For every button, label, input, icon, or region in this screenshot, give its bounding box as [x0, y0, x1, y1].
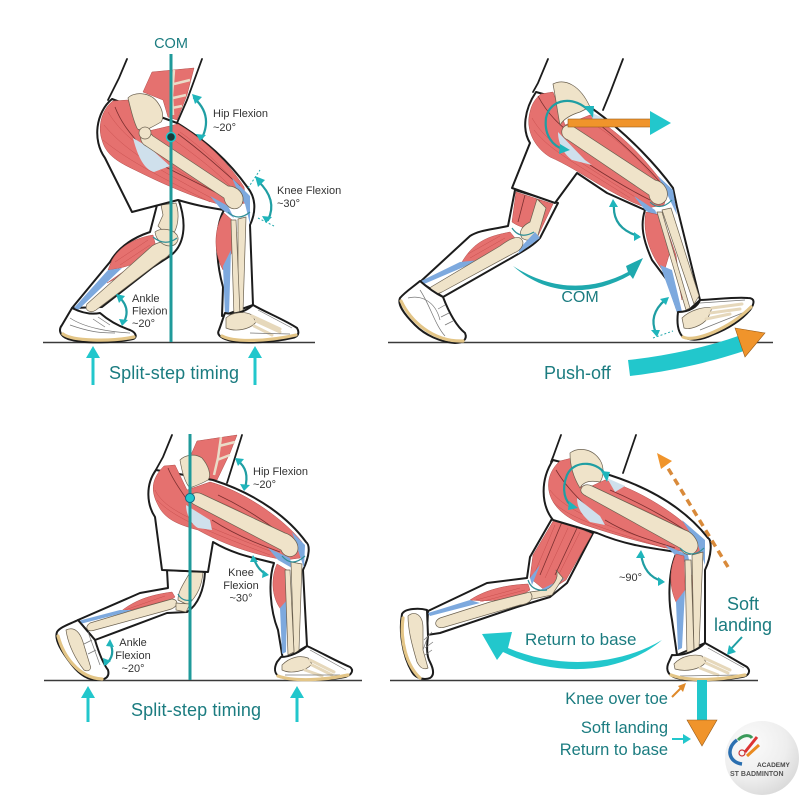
- small pointer arrow: [672, 734, 691, 744]
- centre of mass marker: [166, 132, 176, 142]
- knee flexion label: Flexion: [223, 580, 259, 592]
- ground line: [44, 680, 362, 682]
- ankle flexion arrow: [103, 639, 114, 666]
- caption: Split-step timing: [131, 700, 261, 720]
- timing arrow right: [290, 686, 304, 722]
- knee over toe label: Knee over toe: [565, 690, 668, 708]
- hip flexion label: Hip Flexion: [253, 466, 308, 478]
- ankle flexion label: Flexion: [115, 650, 151, 662]
- knee angle arrow: [609, 199, 641, 241]
- back leg: [56, 570, 205, 680]
- ground line: [43, 342, 315, 344]
- knee flexion label: Knee Flexion: [277, 185, 341, 197]
- timing arrow right: [248, 346, 262, 385]
- 90 degree label: ~90°: [619, 572, 642, 584]
- torso outline and abdominal muscle: [153, 435, 242, 483]
- return to base label: Return to base: [525, 630, 637, 649]
- 90 degree knee arrow: [636, 550, 665, 586]
- hip rotation arrow: [546, 101, 594, 154]
- return to base arrow: [482, 632, 662, 669]
- panel: push-off: [388, 59, 773, 383]
- knee flexion arrow: [248, 170, 274, 226]
- push-off arrow: [628, 328, 765, 376]
- logo badge: [725, 721, 799, 795]
- COM movement arrow: [513, 258, 643, 290]
- back leg: [399, 190, 558, 343]
- soft landing pointer: [727, 637, 742, 655]
- hip flexion label: ~20°: [213, 122, 236, 134]
- ground line: [390, 680, 758, 682]
- front leg: [148, 455, 352, 680]
- hip rotation arrow: [564, 464, 610, 510]
- knee flexion label: ~30°: [229, 592, 253, 604]
- hip flexion arrow: [235, 458, 250, 491]
- torso outline and abdominal muscle: [108, 59, 202, 123]
- soft landing and return label: Soft landing: [581, 719, 668, 737]
- back leg: [401, 517, 593, 679]
- logo badge: ACADEMY: [757, 762, 791, 769]
- torso outline: [533, 59, 623, 110]
- hip flexion label: Hip Flexion: [213, 108, 268, 120]
- timing arrow left: [86, 346, 100, 385]
- downward force arrow: [687, 680, 717, 746]
- ankle angle arrow: [651, 297, 673, 338]
- front leg: [97, 94, 298, 342]
- soft landing label: Soft: [727, 594, 759, 614]
- front leg: [512, 82, 754, 340]
- push-off label: Push-off: [544, 363, 612, 383]
- caption: Split-step timing: [109, 363, 239, 383]
- ankle flexion label: Ankle: [132, 293, 160, 305]
- back leg: [60, 198, 184, 342]
- knee flexion arrow: [250, 555, 269, 578]
- front leg: [544, 449, 749, 680]
- panel: lunge landing and return: [390, 435, 772, 759]
- ankle flexion label: ~20°: [132, 318, 155, 330]
- COM label: COM: [154, 36, 188, 52]
- forward force arrow: [568, 111, 671, 135]
- ankle flexion label: Ankle: [119, 637, 147, 649]
- ankle flexion arrow: [116, 294, 128, 326]
- timing arrow left: [81, 686, 95, 722]
- knee flexion label: ~30°: [277, 198, 300, 210]
- panel: deep split-step lunge: [44, 434, 362, 722]
- hip flexion label: ~20°: [253, 479, 276, 491]
- knee flexion label: Knee: [228, 567, 254, 579]
- centre of mass marker: [186, 494, 194, 502]
- centre of mass line: [170, 54, 172, 342]
- torso outline: [551, 435, 636, 473]
- COM label: COM: [561, 289, 599, 306]
- knee over toe pointer: [672, 683, 686, 697]
- soft landing and return label: Return to base: [560, 741, 668, 759]
- ground line: [388, 342, 773, 344]
- soft landing label: landing: [714, 615, 772, 635]
- knee-over-toe dashed arrow: [657, 453, 728, 567]
- ankle flexion label: Flexion: [132, 306, 167, 318]
- hip flexion arrow: [192, 94, 206, 141]
- panel: split-step stance, upright: [43, 36, 341, 385]
- centre of mass line: [188, 434, 192, 680]
- logo badge: ST BADMINTON: [730, 771, 784, 778]
- ankle flexion label: ~20°: [121, 663, 145, 675]
